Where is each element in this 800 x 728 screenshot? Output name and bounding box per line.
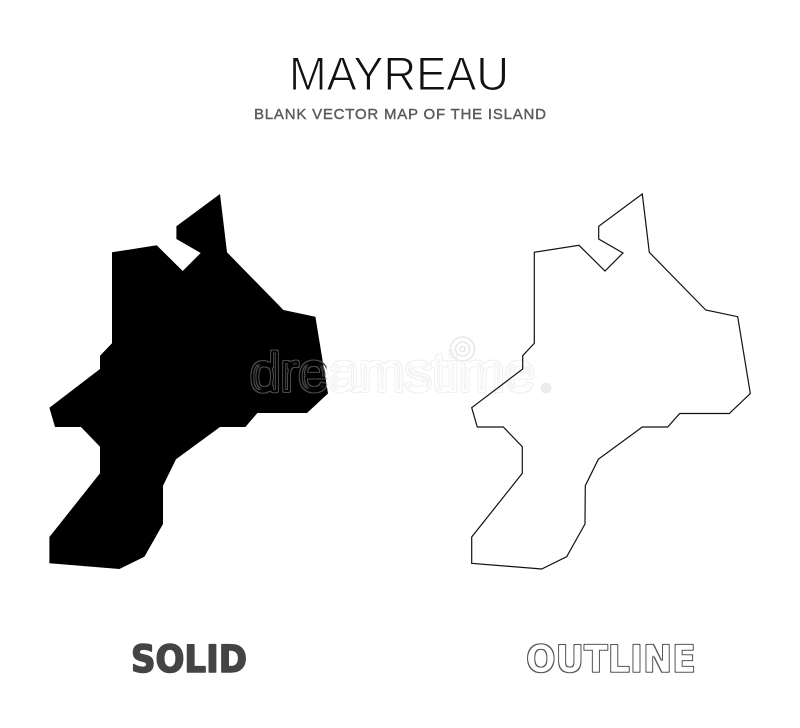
watermark spiral icon [450, 337, 474, 361]
solid map of the island [49, 194, 328, 569]
outline label: OUTLINE [526, 637, 696, 681]
watermark [250, 337, 552, 403]
watermark registered mark [540, 382, 552, 394]
subtitle: BLANK VECTOR MAP OF THE ISLAND [254, 106, 546, 123]
title: MAYREAU [289, 48, 509, 101]
outline map of the island [472, 194, 750, 569]
watermark wordmark: dreamstime [250, 341, 535, 403]
solid label: SOLID [131, 637, 247, 681]
